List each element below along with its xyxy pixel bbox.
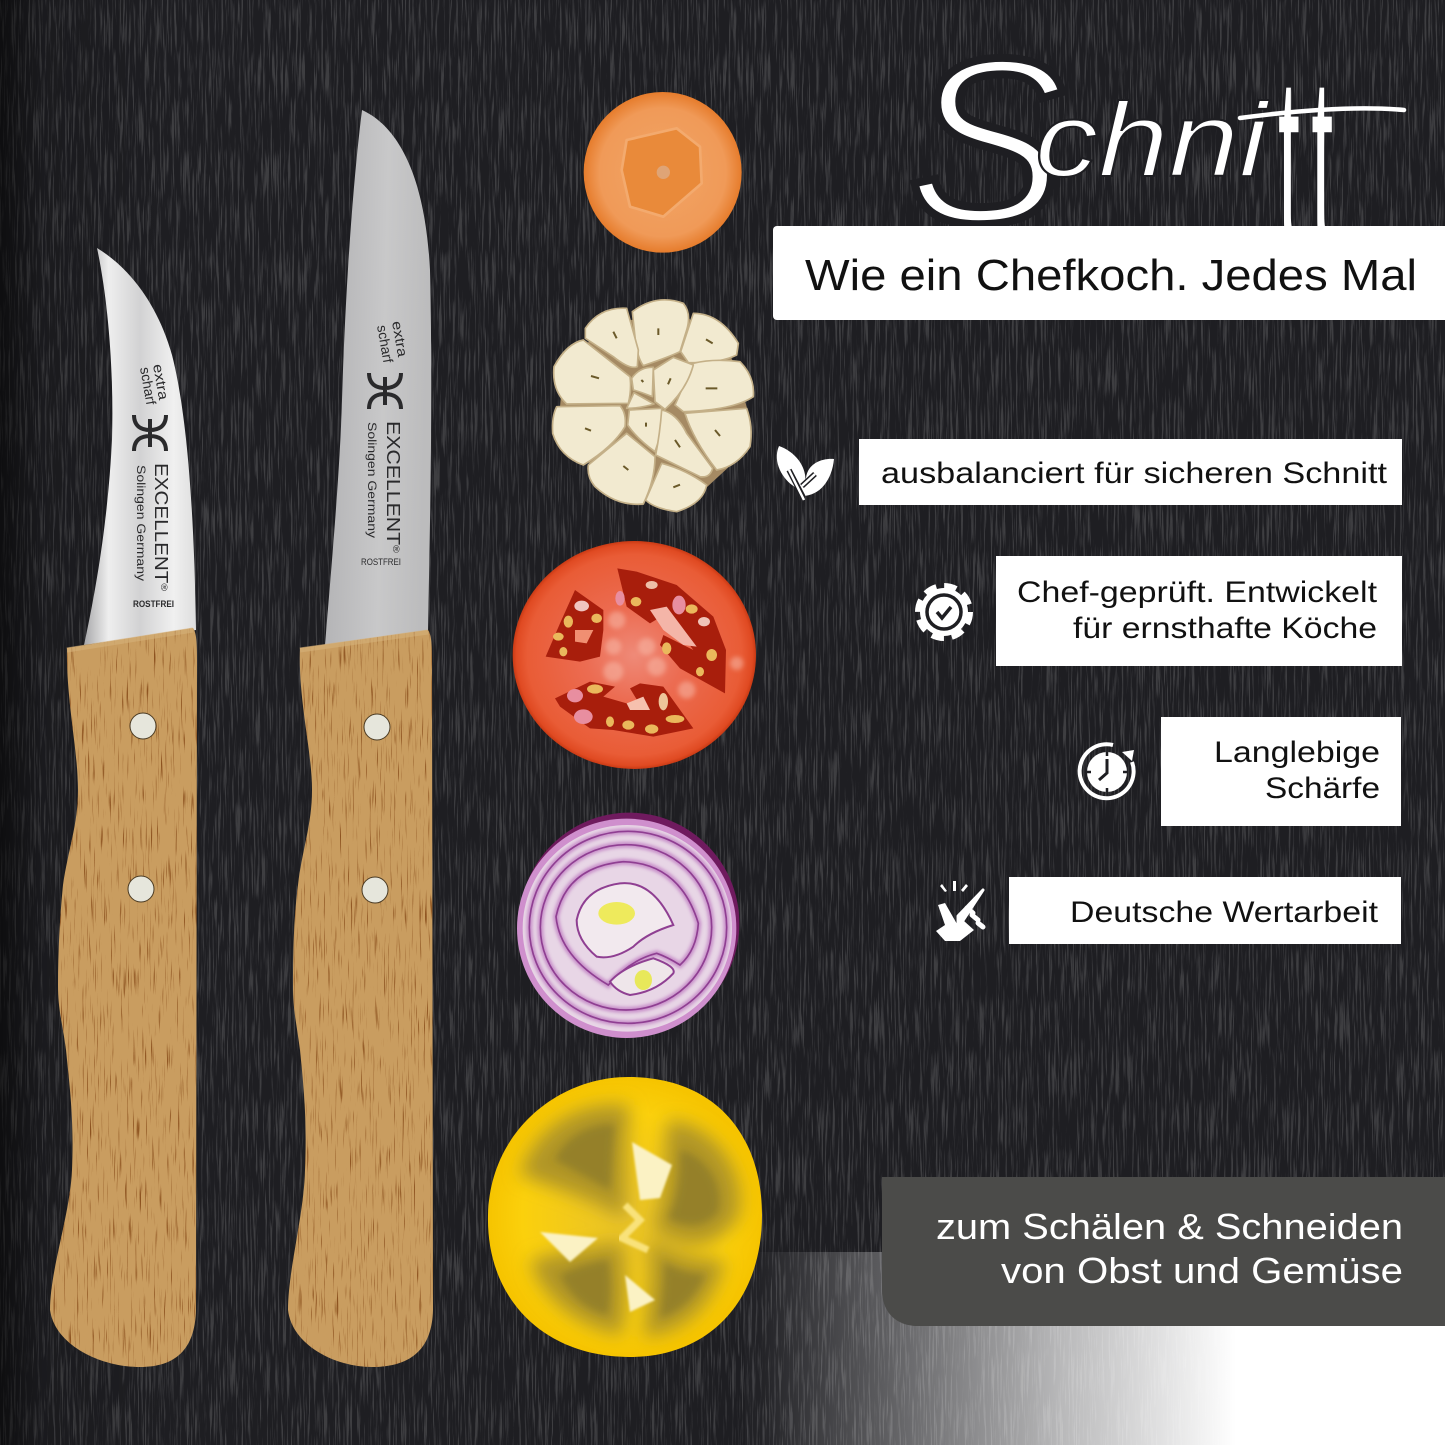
feature: german craftsmanship: Deutsche Wertarbeit <box>1070 896 1379 929</box>
blade engraving: EXCELLENT <box>151 463 171 568</box>
blade engraving: ROSTFREI <box>361 557 401 568</box>
rivets <box>362 714 390 903</box>
icon: leaves <box>777 446 834 500</box>
blade engraving: Solingen Germany <box>134 465 148 581</box>
flesh highlights <box>603 611 743 699</box>
handle bevel <box>300 632 428 650</box>
blade engraving: extra <box>389 320 411 358</box>
feature: balanced: ausbalanciert für sicheren Schnitt <box>881 457 1388 490</box>
feature: chef tested: für ernsthafte Köche <box>1073 612 1377 645</box>
wooden handle <box>288 630 433 1367</box>
callout panel: use case: von Obst und Gemüse <box>1001 1250 1403 1291</box>
blade engraving <box>133 363 174 610</box>
blade <box>325 110 431 645</box>
garlic germ marks <box>585 328 720 487</box>
blade engraving: scharf <box>374 324 396 364</box>
feature: lasting sharpness: Langlebige <box>1214 736 1380 769</box>
white pulp <box>650 607 697 647</box>
label box <box>1161 717 1401 826</box>
label box <box>1009 877 1401 944</box>
wooden handle <box>50 628 197 1367</box>
blade engraving: ROSTFREI <box>133 599 174 610</box>
handle bevel <box>67 630 193 650</box>
seeds <box>553 581 717 734</box>
garlic slice <box>552 300 753 512</box>
feature: chef tested <box>919 556 1402 666</box>
onion rings <box>529 831 727 1023</box>
blade <box>84 248 196 645</box>
blade engraving: extra <box>150 363 172 401</box>
feature: balanced <box>777 439 1402 505</box>
feature: lasting sharpness <box>1080 717 1401 826</box>
callout panel: use case: zum Schälen & Schneiden <box>936 1206 1403 1247</box>
pepper core <box>540 1142 672 1312</box>
title: script heading: chni <box>1035 82 1270 199</box>
yellow pepper slice <box>488 1077 762 1357</box>
callout panel: use case <box>882 1177 1445 1326</box>
title flourish: t crossbar <box>1240 108 1404 118</box>
icon: hand tapping <box>936 881 983 941</box>
onion core <box>577 883 673 957</box>
red onion slice <box>517 813 739 1038</box>
icon: gear with check <box>919 587 969 637</box>
label box <box>996 556 1402 666</box>
blade engraving: EXCELLENT <box>383 421 403 526</box>
headline banner: Wie ein Chefkoch. Jedes Mal <box>805 251 1417 300</box>
seed chambers <box>546 568 726 737</box>
blade engraving: scharf <box>137 366 159 406</box>
blade engraving <box>361 320 411 568</box>
label box <box>859 439 1402 505</box>
icon: clock with arrow <box>1080 744 1134 798</box>
knife: straight vegetable knife <box>288 110 433 1367</box>
title: script heading: S <box>908 9 1065 272</box>
title: script heading <box>908 9 1404 299</box>
pepper chambers <box>520 1104 740 1337</box>
title letters tt: tt <box>1278 24 1345 299</box>
rivets <box>128 713 156 902</box>
blade engraving: ® <box>391 545 401 553</box>
blade engraving: ® <box>159 583 169 591</box>
tomato slice <box>513 541 756 769</box>
headline banner <box>773 226 1445 320</box>
knife: small curved paring knife <box>50 248 197 1367</box>
carrot slice <box>584 92 742 253</box>
feature: german craftsmanship <box>936 877 1401 944</box>
feature: lasting sharpness: Schärfe <box>1265 772 1380 805</box>
feature: chef tested: Chef-geprüft. Entwickelt <box>1017 576 1378 609</box>
blade engraving: Solingen Germany <box>365 422 379 538</box>
